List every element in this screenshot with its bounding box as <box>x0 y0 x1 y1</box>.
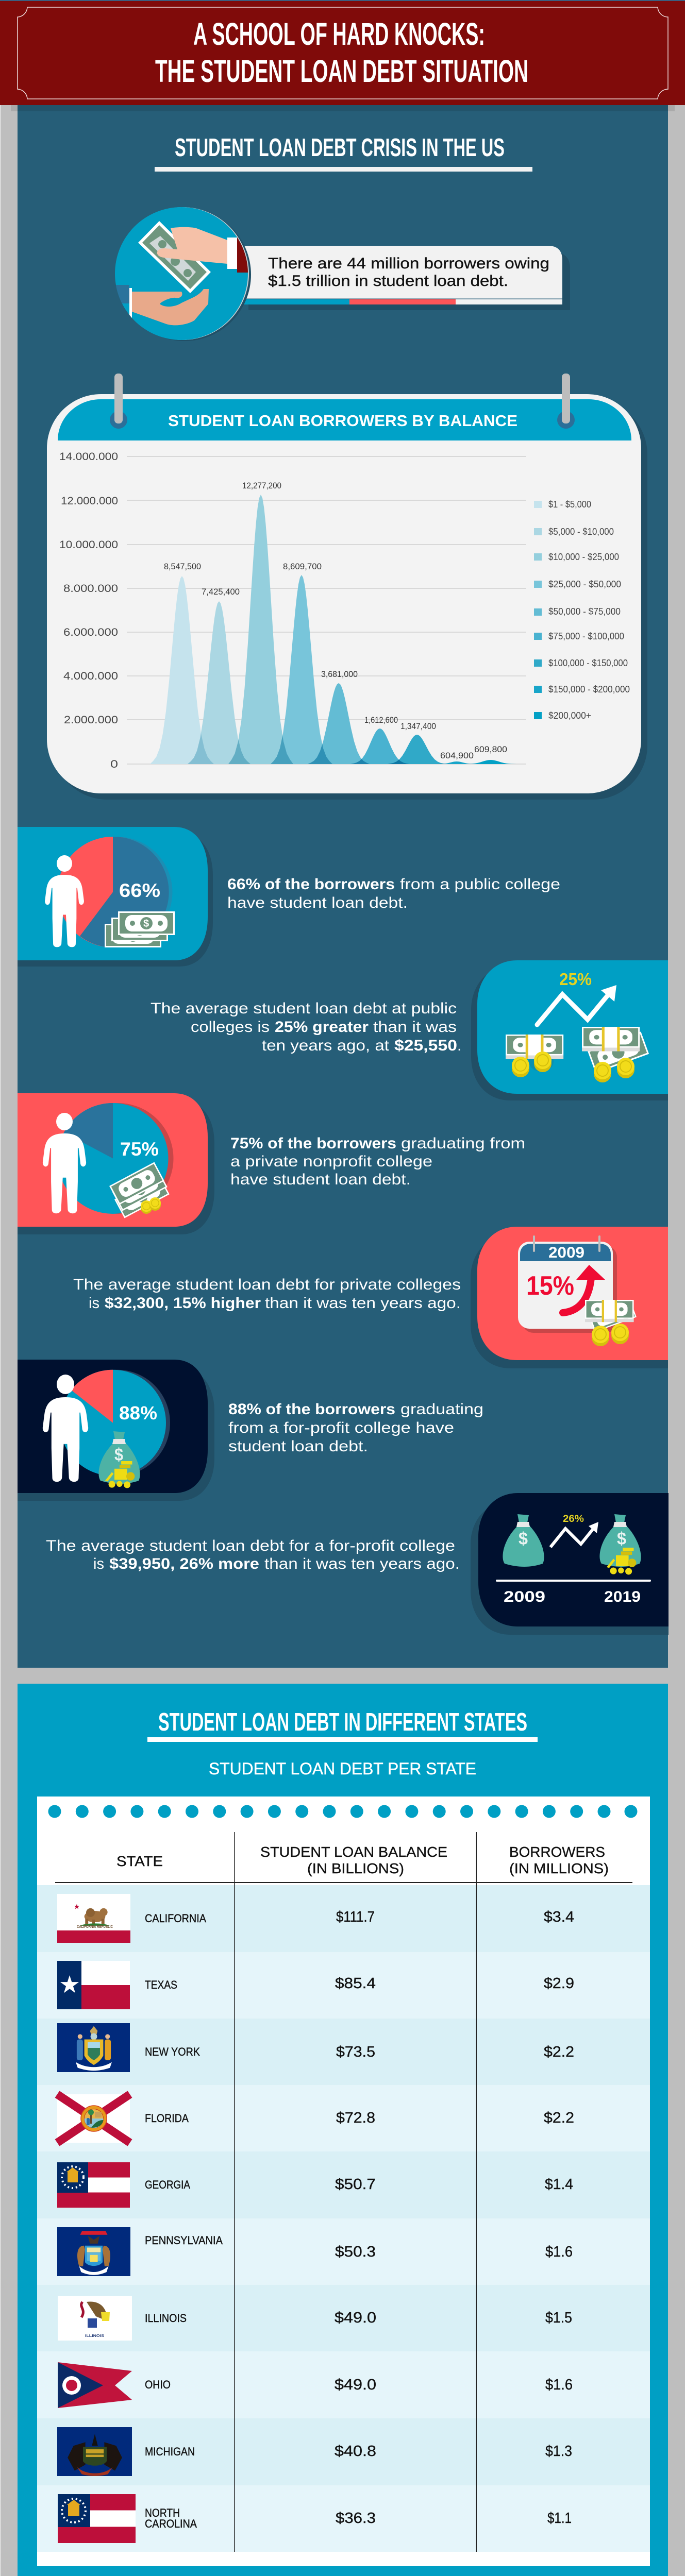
chart legend <box>534 499 630 721</box>
section heading: crisis in the US: STUDENT LOAN DEBT CRISIS IN THE US <box>175 134 505 162</box>
text: 88% of borrowers <box>228 1401 483 1455</box>
row: Ohio: $1.6 <box>545 2377 573 2393</box>
flag: California <box>57 1894 130 1943</box>
row: Texas: $2.9 <box>544 1975 574 1992</box>
panel: student loan debt crisis <box>11 105 675 1668</box>
callout text: $1.5 trillion in student loan debt. <box>268 273 508 290</box>
flag: Georgia <box>58 2494 136 2543</box>
text: 88% of borrowers: graduating <box>400 1401 483 1418</box>
callout text <box>268 255 549 290</box>
text: public colleges 25% greater: 25% greater <box>275 1019 369 1036</box>
text: private colleges 15% higher: $32,300, 15% higher <box>105 1295 261 1312</box>
icon: rising arrow <box>537 985 616 1025</box>
chart legend: $25,000 - $50,000 <box>548 579 621 589</box>
chart: y axis and grid: 14.000.000 <box>59 451 118 463</box>
icon: money bag and gold <box>98 1431 140 1488</box>
table header row: (IN BILLIONS) <box>307 1860 404 1876</box>
icon: money and coins <box>585 1300 637 1346</box>
text: public colleges 25% greater: $25,550 <box>394 1037 457 1054</box>
callout card <box>242 246 570 310</box>
text: 75% of borrowers: have student loan debt. <box>230 1171 411 1188</box>
text: 88% of borrowers: from a for-profit college have <box>228 1419 454 1436</box>
icon: tilted money and coins <box>109 1162 170 1218</box>
row: Ohio: OHIO <box>145 2378 171 2391</box>
banner: title <box>0 1 685 105</box>
text: private colleges 15% higher <box>73 1276 461 1312</box>
row: Pennsylvania: $1.6 <box>545 2244 573 2260</box>
panel: 75% private nonprofit <box>18 1093 214 1234</box>
text: 66% of borrowers <box>227 876 560 911</box>
row: North Carolina: $1.1 <box>547 2510 572 2527</box>
callout: 44 million borrowers <box>115 207 570 341</box>
pie chart 66% <box>58 837 172 947</box>
panel: student loan debt in different states <box>18 1684 668 2576</box>
text: private colleges 15% higher: than it was ten years ago. <box>265 1295 461 1312</box>
text: 75% of borrowers: 75% of the borrowers <box>230 1135 396 1152</box>
row: Ohio: $49.0 <box>335 2377 376 2393</box>
row: New York: NEW YORK <box>145 2045 200 2058</box>
row: Illinois <box>58 2296 572 2341</box>
pie chart 66%: 66% <box>119 880 160 901</box>
flag: Illinois: ILLINOIS <box>85 2334 104 2338</box>
row: New York <box>57 2023 574 2072</box>
chart legend: $150,000 - $200,000 <box>548 684 630 694</box>
text: 66% of borrowers: have student loan debt. <box>227 894 408 911</box>
chart header: STUDENT LOAN BORROWERS BY BALANCE <box>168 412 517 430</box>
text: 75% of borrowers: a private nonprofit college <box>230 1153 432 1170</box>
row: North Carolina: $36.3 <box>336 2510 376 2527</box>
pie chart 75% <box>58 1103 173 1214</box>
chart: y axis and grid: 10.000.000 <box>59 539 118 551</box>
row: California <box>57 1894 574 1943</box>
text: public colleges 25% greater <box>151 1000 461 1054</box>
row: Georgia: $50.7 <box>335 2176 376 2193</box>
chart: data labels: 1,347,400 <box>400 721 436 731</box>
flag: Georgia <box>57 2162 130 2208</box>
chart legend: $50,000 - $75,000 <box>548 606 621 617</box>
timeline: 2009 <box>504 1588 545 1605</box>
chart card: student loan borrowers by balance <box>47 374 647 800</box>
text: for-profit 26% more: The average student loan debt for a for-profit college <box>46 1537 455 1554</box>
text: 75% of borrowers: graduating from <box>401 1135 525 1152</box>
text: for-profit 26% more <box>46 1537 460 1572</box>
row: Pennsylvania <box>57 2227 573 2276</box>
chart: y axis and grid: 8.000.000 <box>63 583 118 595</box>
icon: calendar: 15% <box>526 1271 574 1301</box>
icon: money stack <box>105 911 175 947</box>
icon: bag 2009 <box>503 1514 544 1567</box>
section heading: crisis in the US <box>155 134 532 172</box>
row: Georgia <box>57 2162 573 2208</box>
subheading: per state: STUDENT LOAN DEBT PER STATE <box>209 1759 476 1778</box>
row: Pennsylvania: PENNSYLVANIA <box>145 2234 223 2247</box>
chart: data labels: 1,612,600 <box>364 715 398 725</box>
panel: 2009 vs 2019 bags <box>471 1493 669 1635</box>
flag: California: CALIFORNIA REPUBLIC <box>77 1924 113 1929</box>
row: Michigan: $1.3 <box>545 2443 572 2460</box>
panel: 15% calendar <box>471 1227 668 1368</box>
row: Illinois: ILLINOIS <box>145 2312 187 2325</box>
text: for-profit 26% more: than it was ten years ago. <box>264 1555 460 1572</box>
row: North Carolina: NORTH <box>145 2506 180 2519</box>
chart: y axis and grid: 6.000.000 <box>63 626 118 638</box>
flag: Florida <box>57 2094 130 2143</box>
icon: person <box>43 1113 86 1213</box>
chart legend: $100,000 - $150,000 <box>548 658 628 668</box>
pie chart 75%: 75% <box>120 1139 159 1160</box>
timeline: 2019 <box>604 1588 641 1605</box>
table header row: (IN MILLIONS) <box>509 1860 609 1876</box>
text: 66% of borrowers: from a public college <box>400 876 560 893</box>
section heading <box>147 1708 538 1742</box>
flag: New York <box>57 2023 130 2072</box>
table header row: BORROWERS <box>509 1844 605 1860</box>
text: public colleges 25% greater: The average student loan debt at public <box>151 1000 457 1017</box>
text: 75% of borrowers <box>230 1135 525 1188</box>
chart legend: $1 - $5,000 <box>548 499 591 510</box>
chart: data labels: 604,900 <box>440 751 474 760</box>
chart legend: $200,000+ <box>548 710 591 721</box>
icon: money bag and gold: $ <box>114 1445 123 1465</box>
row: Georgia: $1.4 <box>545 2176 573 2193</box>
icon: calendar <box>518 1235 617 1333</box>
row: California: $111.7 <box>336 1909 375 1925</box>
flag: Illinois <box>58 2296 132 2341</box>
icon: money and coins right <box>582 1027 649 1082</box>
text: public colleges 25% greater: than it was <box>373 1019 457 1036</box>
pie chart 88% <box>60 1370 170 1476</box>
chart: bell curves <box>150 495 516 764</box>
chart: y axis and grid <box>59 451 526 770</box>
icon: person <box>45 855 84 947</box>
text: for-profit 26% more: $39,950, 26% more <box>109 1555 259 1572</box>
chart: data labels: 609,800 <box>474 744 507 754</box>
flag: Michigan <box>57 2227 130 2276</box>
text: public colleges 25% greater: ten years ago, at <box>262 1037 390 1054</box>
row: Florida: $2.2 <box>544 2110 574 2126</box>
panel: 88% for-profit <box>18 1360 214 1501</box>
table header row <box>116 1844 609 1876</box>
icon: calendar: 2009 <box>548 1244 584 1261</box>
text: 66% of borrowers: 66% of the borrowers <box>227 876 395 893</box>
row: California: CALIFORNIA <box>145 1912 206 1925</box>
flag: Pennsylvania <box>57 2427 132 2476</box>
chart: y axis and grid: 4.000.000 <box>63 670 118 682</box>
text: private colleges 15% higher: is <box>89 1295 99 1312</box>
chart: y axis and grid: 12.000.000 <box>61 495 118 507</box>
icon: money and coins left <box>506 1035 563 1077</box>
row: New York: $73.5 <box>336 2044 375 2060</box>
chart: data labels: 7,425,400 <box>202 587 240 597</box>
flag: Ohio <box>58 2362 132 2408</box>
chart: data labels: 8,547,500 <box>164 562 201 571</box>
icon: bag 2019 with gold: $ <box>617 1529 626 1549</box>
icon: hands exchanging money <box>115 207 251 341</box>
text: 88% of borrowers: 88% of the borrowers <box>228 1401 395 1418</box>
text: for-profit 26% more: is <box>93 1555 104 1572</box>
text: 88% of borrowers: student loan debt. <box>228 1438 368 1455</box>
row: Illinois: $1.5 <box>545 2310 572 2326</box>
table card <box>37 1797 650 2566</box>
callout text: There are 44 million borrowers owing <box>268 255 549 272</box>
chart: data labels: 8,609,700 <box>283 562 322 571</box>
icon: bag 2009: $ <box>519 1529 528 1549</box>
row: Texas: $85.4 <box>335 1975 376 1992</box>
table header row: STATE <box>116 1853 163 1869</box>
label 25%: 25% <box>559 970 592 989</box>
row: Florida: $72.8 <box>336 2110 375 2126</box>
chart: data labels: 3,681,000 <box>321 669 358 679</box>
row: North Carolina <box>58 2494 572 2543</box>
icon: bag 2019 with gold <box>599 1514 641 1574</box>
title text <box>155 16 528 89</box>
chart: data labels <box>164 481 507 760</box>
row: Florida: FLORIDA <box>145 2112 189 2125</box>
panel: 66% public college <box>18 827 213 967</box>
title text: A SCHOOL OF HARD KNOCKS: <box>193 16 485 52</box>
row: Pennsylvania: $50.3 <box>335 2244 376 2260</box>
chart: y axis and grid: 2.000.000 <box>64 714 118 726</box>
icon: rising arrow <box>550 1522 598 1547</box>
timeline <box>496 1580 651 1605</box>
chart: data labels: 12,277,200 <box>242 481 281 490</box>
pie chart 88%: 88% <box>119 1402 157 1423</box>
chart header <box>58 374 631 440</box>
label 26%: 26% <box>563 1514 584 1524</box>
row: Texas: TEXAS <box>145 1978 177 1991</box>
row: California: $3.4 <box>544 1909 574 1925</box>
text: private colleges 15% higher: The average student loan debt for private colleges <box>73 1276 461 1293</box>
row: North Carolina: CAROLINA <box>145 2517 197 2530</box>
chart legend: $75,000 - $100,000 <box>548 631 624 641</box>
icon: person <box>43 1375 88 1482</box>
chart: y axis and grid: 0 <box>110 758 118 770</box>
row: Florida <box>57 2094 574 2143</box>
row: New York: $2.2 <box>544 2044 574 2060</box>
row: Michigan: MICHIGAN <box>145 2445 195 2458</box>
row: Michigan <box>57 2427 572 2476</box>
icon: money stack: $ <box>143 918 149 929</box>
row: Illinois: $49.0 <box>335 2310 376 2326</box>
table header row: STUDENT LOAN BALANCE <box>260 1844 447 1860</box>
flag: Texas <box>57 1961 130 2009</box>
row: Ohio <box>58 2362 573 2408</box>
row: Texas <box>57 1961 574 2009</box>
row: Georgia: GEORGIA <box>145 2178 190 2191</box>
chart legend: $5,000 - $10,000 <box>548 527 614 537</box>
text: public colleges 25% greater: . <box>457 1037 461 1054</box>
text: public colleges 25% greater: colleges is <box>191 1019 270 1036</box>
panel: 25% growth <box>471 960 668 1100</box>
row: Michigan: $40.8 <box>335 2443 376 2460</box>
chart legend: $10,000 - $25,000 <box>548 552 619 562</box>
